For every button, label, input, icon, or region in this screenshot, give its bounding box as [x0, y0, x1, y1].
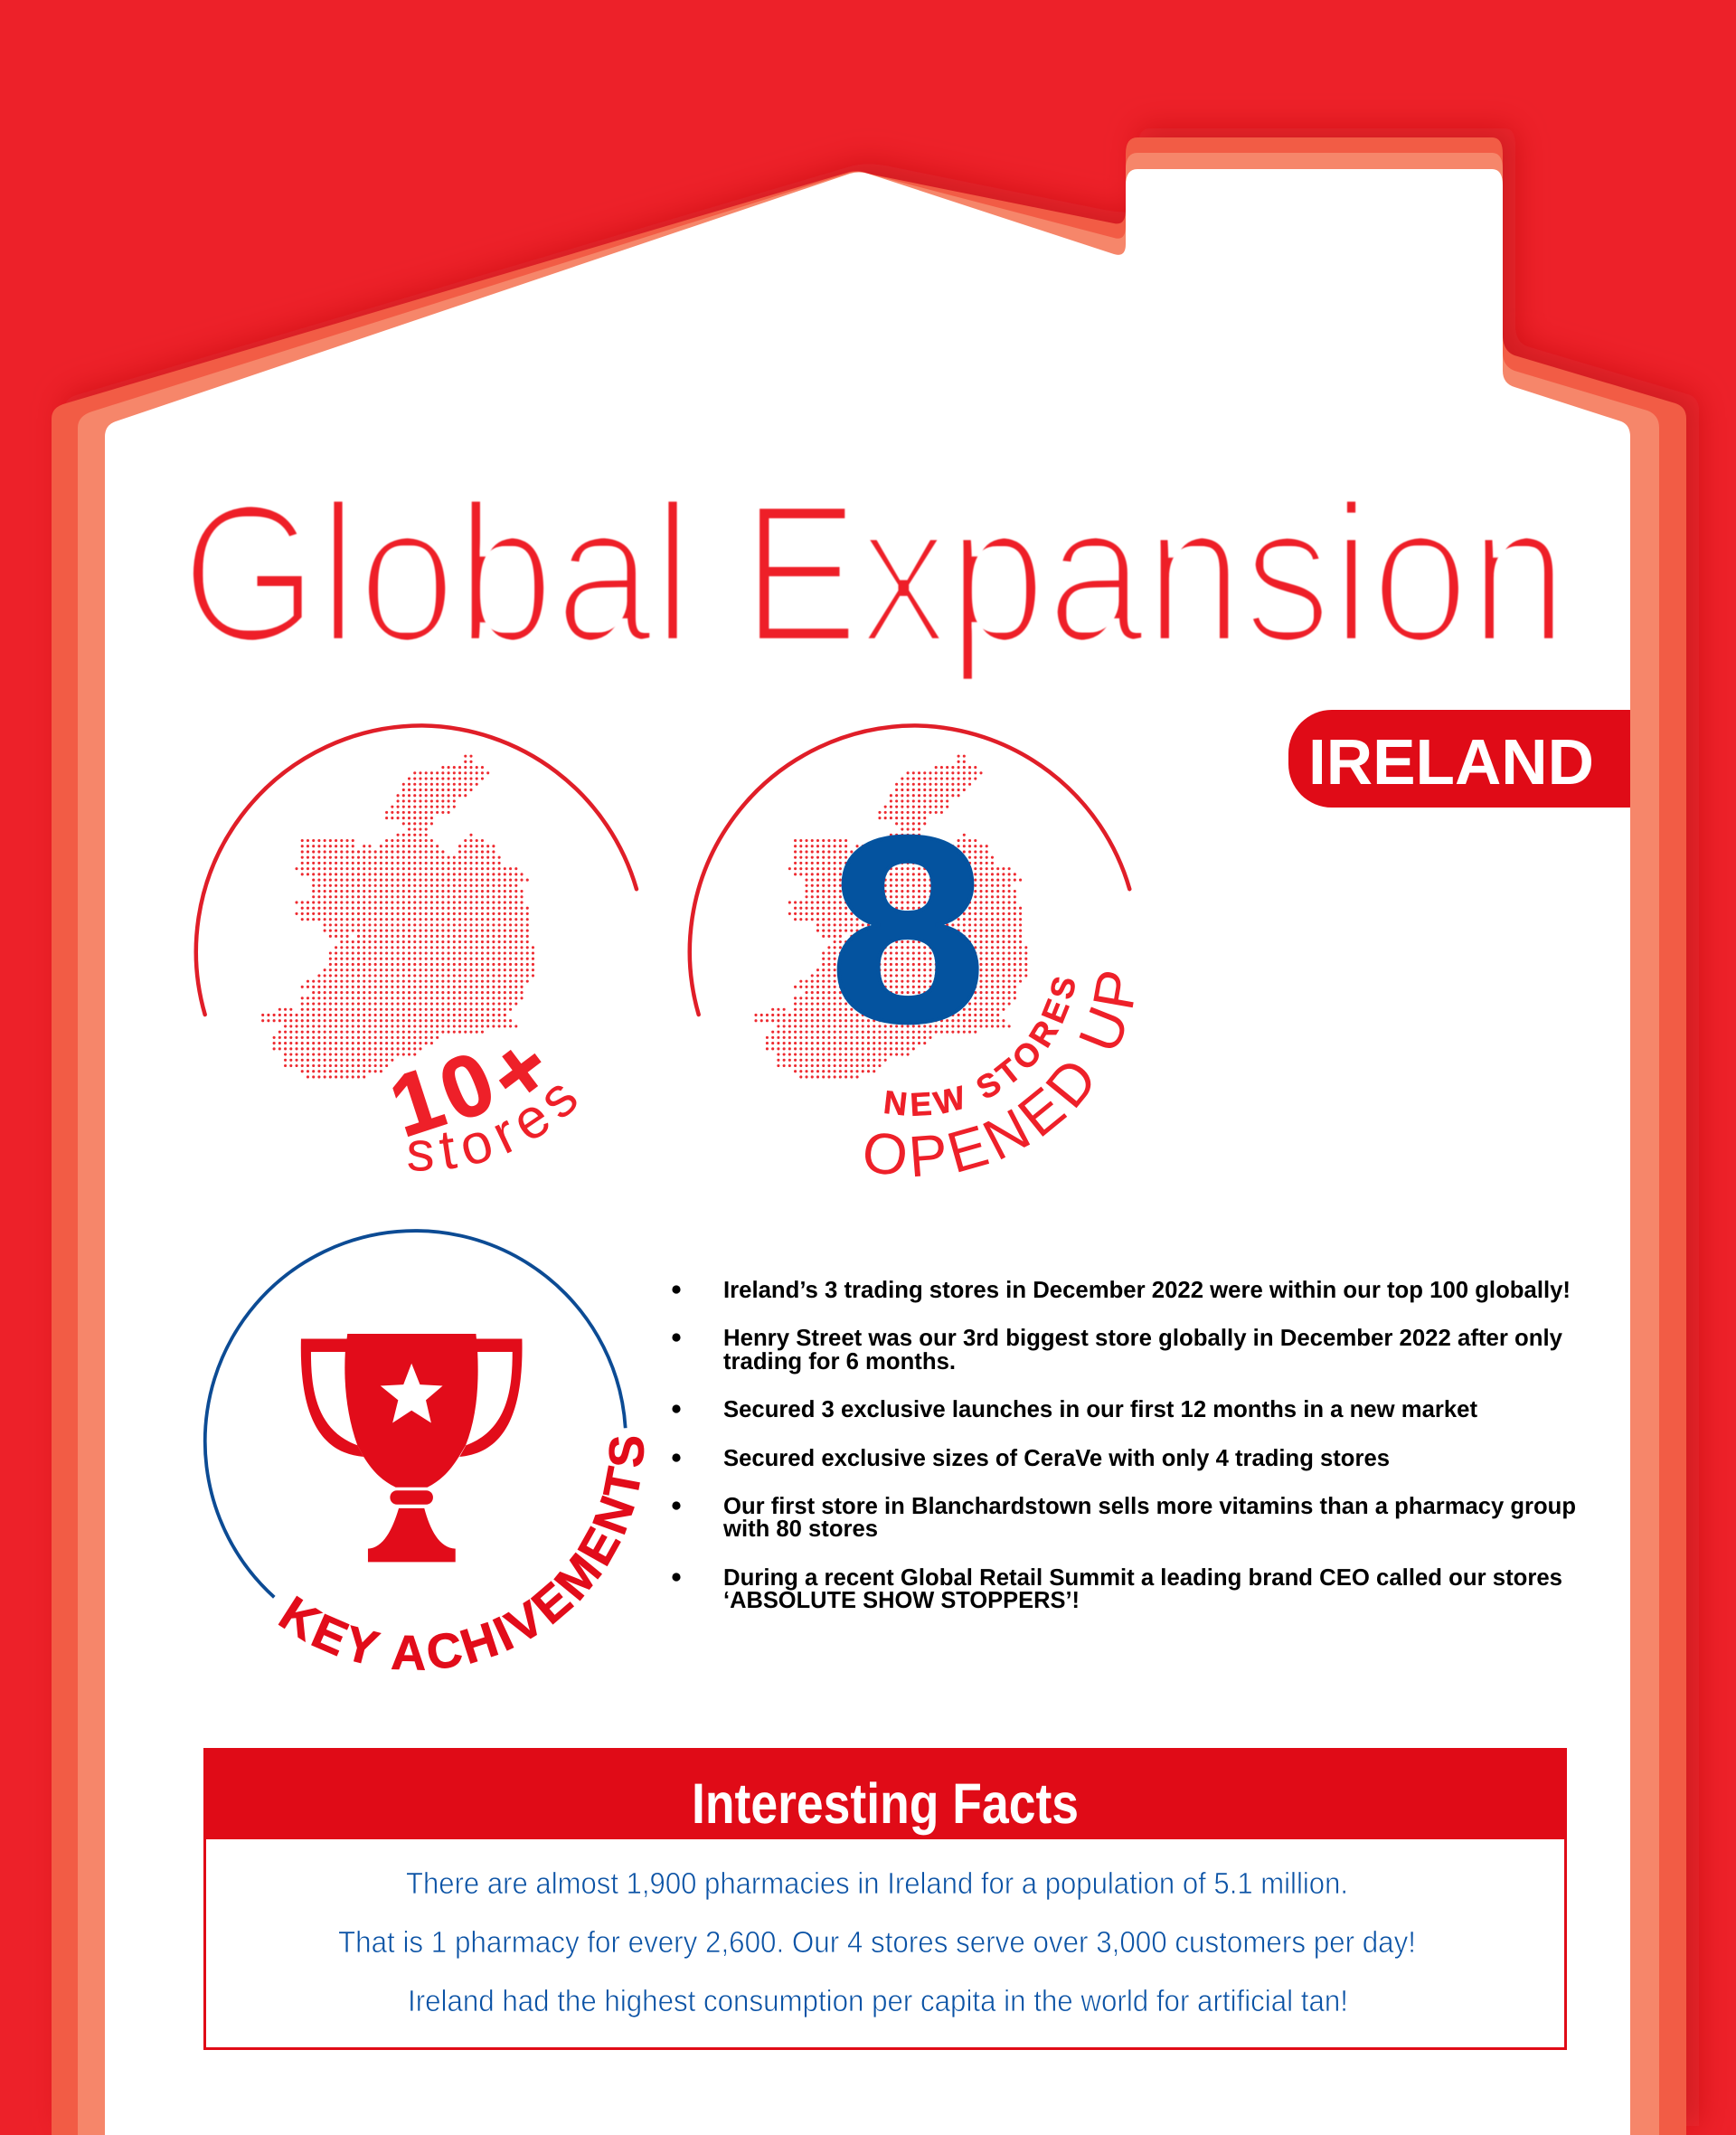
bullet 6 — [672, 1563, 1562, 1613]
panel: 10+ stores — [193, 723, 638, 1171]
number 8: 8 — [830, 781, 986, 1076]
bullet 3: Secured 3 exclusive launches in our first 12 months in a new market — [723, 1395, 1477, 1422]
facts header bar — [203, 1748, 1567, 1839]
label key achivements: KEY ACHIVEMENTS — [278, 1436, 644, 1670]
label new stores: NEW STORES — [884, 977, 1075, 1116]
bullet 5 — [672, 1492, 1576, 1542]
facts heading: Interesting Facts — [692, 1772, 1079, 1836]
dotted map of Ireland — [756, 756, 1026, 1077]
badge: Ireland — [1288, 710, 1630, 808]
bullet 4: Secured exclusive sizes of CeraVe with only 4 trading stores — [723, 1444, 1390, 1471]
bullet 5: with 80 stores — [722, 1515, 878, 1542]
label opened up: OPENED UP — [865, 972, 1134, 1177]
title: Global Expansion — [181, 464, 1568, 683]
label stores: stores — [408, 1085, 577, 1171]
panel: key achievements emblem — [203, 1229, 644, 1670]
panel: interesting facts — [203, 1748, 1567, 2049]
bullet 2: Henry Street was our 3rd biggest store globally in December 2022 after only — [723, 1324, 1563, 1351]
blue arc — [205, 1231, 626, 1597]
arc — [196, 725, 637, 1015]
icon: trophy — [301, 1334, 523, 1562]
bullet 6: During a recent Global Retail Summit a leading brand CEO called our stores — [723, 1563, 1562, 1591]
fact lines: Ireland had the highest consumption per capita in the world for artificial tan! — [408, 1985, 1348, 2018]
number 10+: 10+ — [379, 1017, 569, 1156]
facts box — [204, 1749, 1566, 2049]
arc — [690, 725, 1129, 1015]
fact lines: There are almost 1,900 pharmacies in Ireland for a population of 5.1 million. — [406, 1867, 1348, 1901]
fact lines: That is 1 pharmacy for every 2,600. Our 4 stores serve over 3,000 customers per day! — [338, 1926, 1416, 1960]
bullet 1: Ireland’s 3 trading stores in December 2022 were within our top 100 globally! — [723, 1276, 1571, 1303]
bullet 2: trading for 6 months. — [723, 1347, 956, 1375]
bullet list: key achievements — [672, 1276, 1576, 1613]
dotted map of Ireland — [263, 756, 533, 1077]
bullet 2 — [672, 1324, 1563, 1375]
bullet 6: ‘ABSOLUTE SHOW STOPPERS’! — [723, 1586, 1080, 1613]
panel: 8 new stores opened up — [687, 723, 1134, 1177]
fact lines — [338, 1867, 1416, 2018]
bullet 5: Our first store in Blanchardstown sells more vitamins than a pharmacy group — [723, 1492, 1576, 1519]
badge: Ireland: IRELAND — [1308, 727, 1594, 798]
